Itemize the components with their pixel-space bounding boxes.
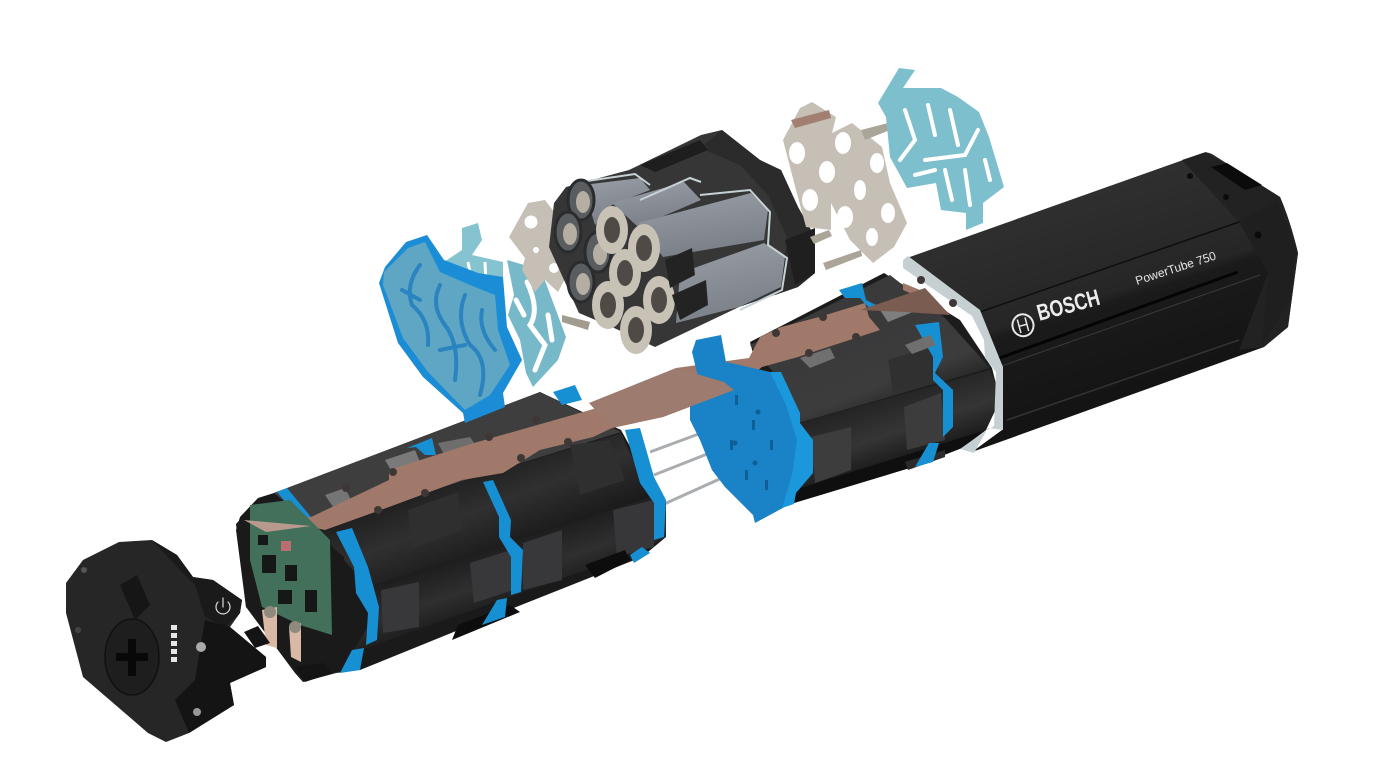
teal insulator, left upper bbox=[444, 223, 503, 300]
terminals bbox=[262, 607, 277, 648]
connector slot bbox=[1211, 163, 1262, 190]
nickel plate, right bbox=[783, 102, 907, 270]
charging socket cross bbox=[116, 639, 148, 676]
contact pins bbox=[342, 276, 957, 514]
charge level LEDs bbox=[171, 625, 177, 662]
blue retaining band bbox=[915, 322, 953, 437]
end cap bbox=[66, 540, 266, 742]
dark body bbox=[549, 130, 815, 347]
cell wraps bbox=[904, 393, 945, 450]
copper strip in front of plate bbox=[589, 368, 734, 428]
left cell tube section bbox=[236, 385, 666, 682]
product name: PowerTube 750 bbox=[1134, 248, 1218, 288]
holder clips bbox=[665, 248, 695, 288]
teal insulator, right bbox=[878, 68, 1004, 230]
right cell tube section bbox=[750, 273, 1000, 503]
blue bands bbox=[336, 528, 379, 645]
lower foot bbox=[295, 663, 332, 682]
blue spacer plate on tube bbox=[690, 335, 813, 523]
exploded cell block bbox=[549, 130, 815, 354]
metal contacts bbox=[880, 295, 925, 322]
metal contacts bbox=[438, 437, 479, 458]
blue outer plate, exploded bbox=[379, 235, 522, 423]
housing end profile bbox=[903, 256, 1003, 453]
circuit board bbox=[236, 500, 344, 682]
power symbol bbox=[216, 598, 230, 614]
housing: black aluminium tube bbox=[907, 152, 1298, 452]
teal insulator, left lower bbox=[507, 260, 566, 387]
cell ends bbox=[555, 180, 611, 302]
rods between cell tube sections bbox=[650, 412, 758, 505]
brand logo: BOSCH bbox=[1007, 284, 1104, 339]
nickel plate, left bbox=[509, 200, 590, 330]
gray cells bbox=[583, 178, 650, 225]
brand logo: BOSCH: BOSCH bbox=[1034, 284, 1103, 326]
copper connector strip bbox=[244, 276, 957, 532]
nickel ring contacts bbox=[592, 206, 675, 354]
cell wraps bbox=[381, 582, 419, 633]
